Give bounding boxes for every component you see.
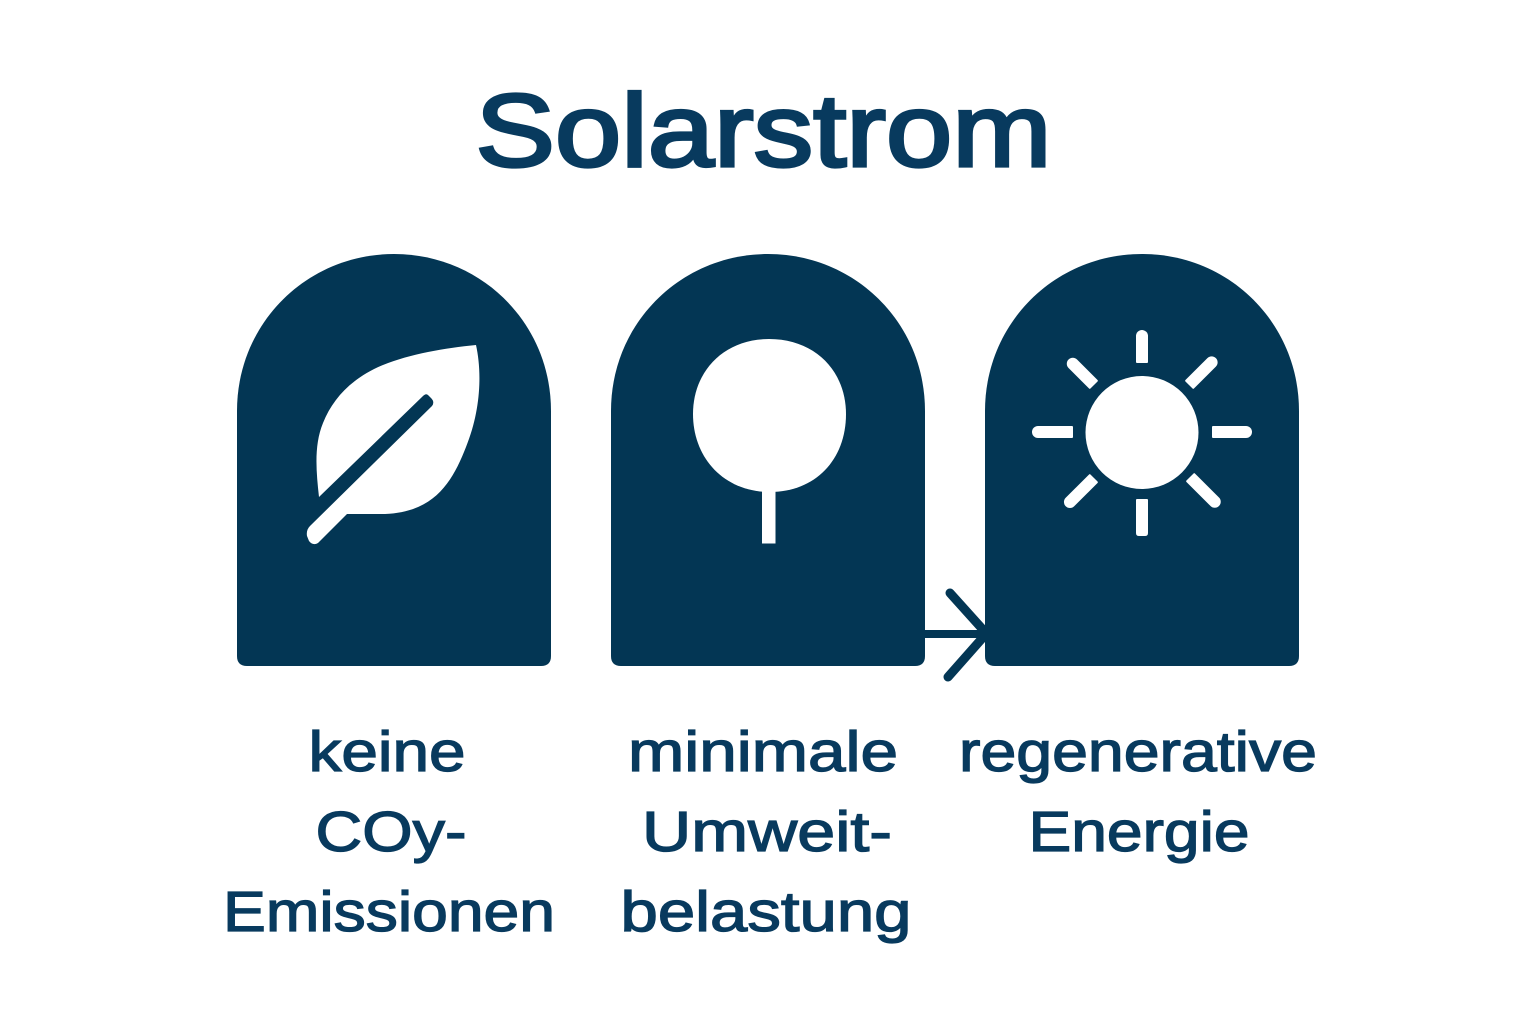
label: minimale Umweltbelastung: minimale	[628, 720, 898, 784]
label: regenerative Energie: regenerative	[959, 720, 1317, 784]
label: regenerative Energie: Energie	[1028, 800, 1250, 864]
panel: keine CO2-Emissionen	[237, 254, 551, 666]
label: regenerative Energie	[959, 720, 1317, 864]
title: Solarstrom	[476, 73, 1052, 188]
icon: sun	[1032, 330, 1252, 536]
icon: leaf	[307, 345, 479, 544]
label: minimale Umweltbelastung: Umweit-	[642, 800, 892, 864]
label: keine CO2-Emissionen: COy-	[316, 800, 466, 864]
label: keine CO2-Emissionen	[223, 720, 555, 944]
panel: minimale Umweltbelastung	[611, 254, 925, 666]
label: minimale Umweltbelastung: belastung	[620, 880, 912, 944]
icon: tree	[693, 339, 846, 544]
label: minimale Umweltbelastung	[620, 720, 912, 944]
label: keine CO2-Emissionen: Emissionen	[223, 880, 555, 944]
arrow	[925, 593, 986, 677]
label: keine CO2-Emissionen: keine	[308, 720, 466, 784]
panel: regenerative Energie	[985, 254, 1299, 666]
